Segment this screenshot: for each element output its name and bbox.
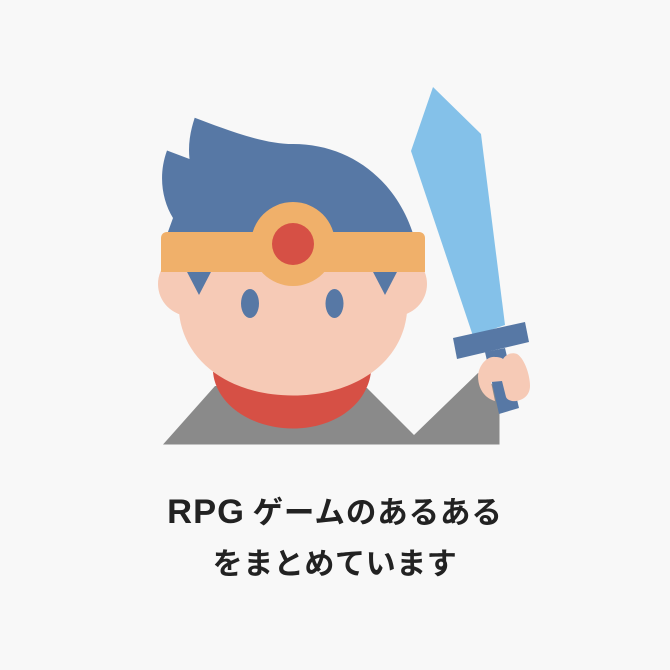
scarf <box>213 372 371 428</box>
icon: sword blade <box>411 87 505 336</box>
right eye <box>326 289 344 318</box>
body <box>163 373 500 444</box>
hair <box>162 118 415 240</box>
left ear <box>158 252 222 316</box>
heading line 2: をまとめています <box>213 548 457 581</box>
right sideburn <box>372 270 398 295</box>
right ear <box>363 252 427 316</box>
heading line 1: RPG ゲームのあるある <box>167 493 503 531</box>
headband <box>161 232 425 272</box>
headband medallion <box>251 202 335 286</box>
left eye <box>241 289 259 318</box>
hand <box>478 353 530 401</box>
left sideburn <box>186 270 212 295</box>
red gem <box>272 223 314 265</box>
head <box>158 252 427 396</box>
icon: sword guard and handle <box>453 322 529 414</box>
face <box>179 262 407 396</box>
